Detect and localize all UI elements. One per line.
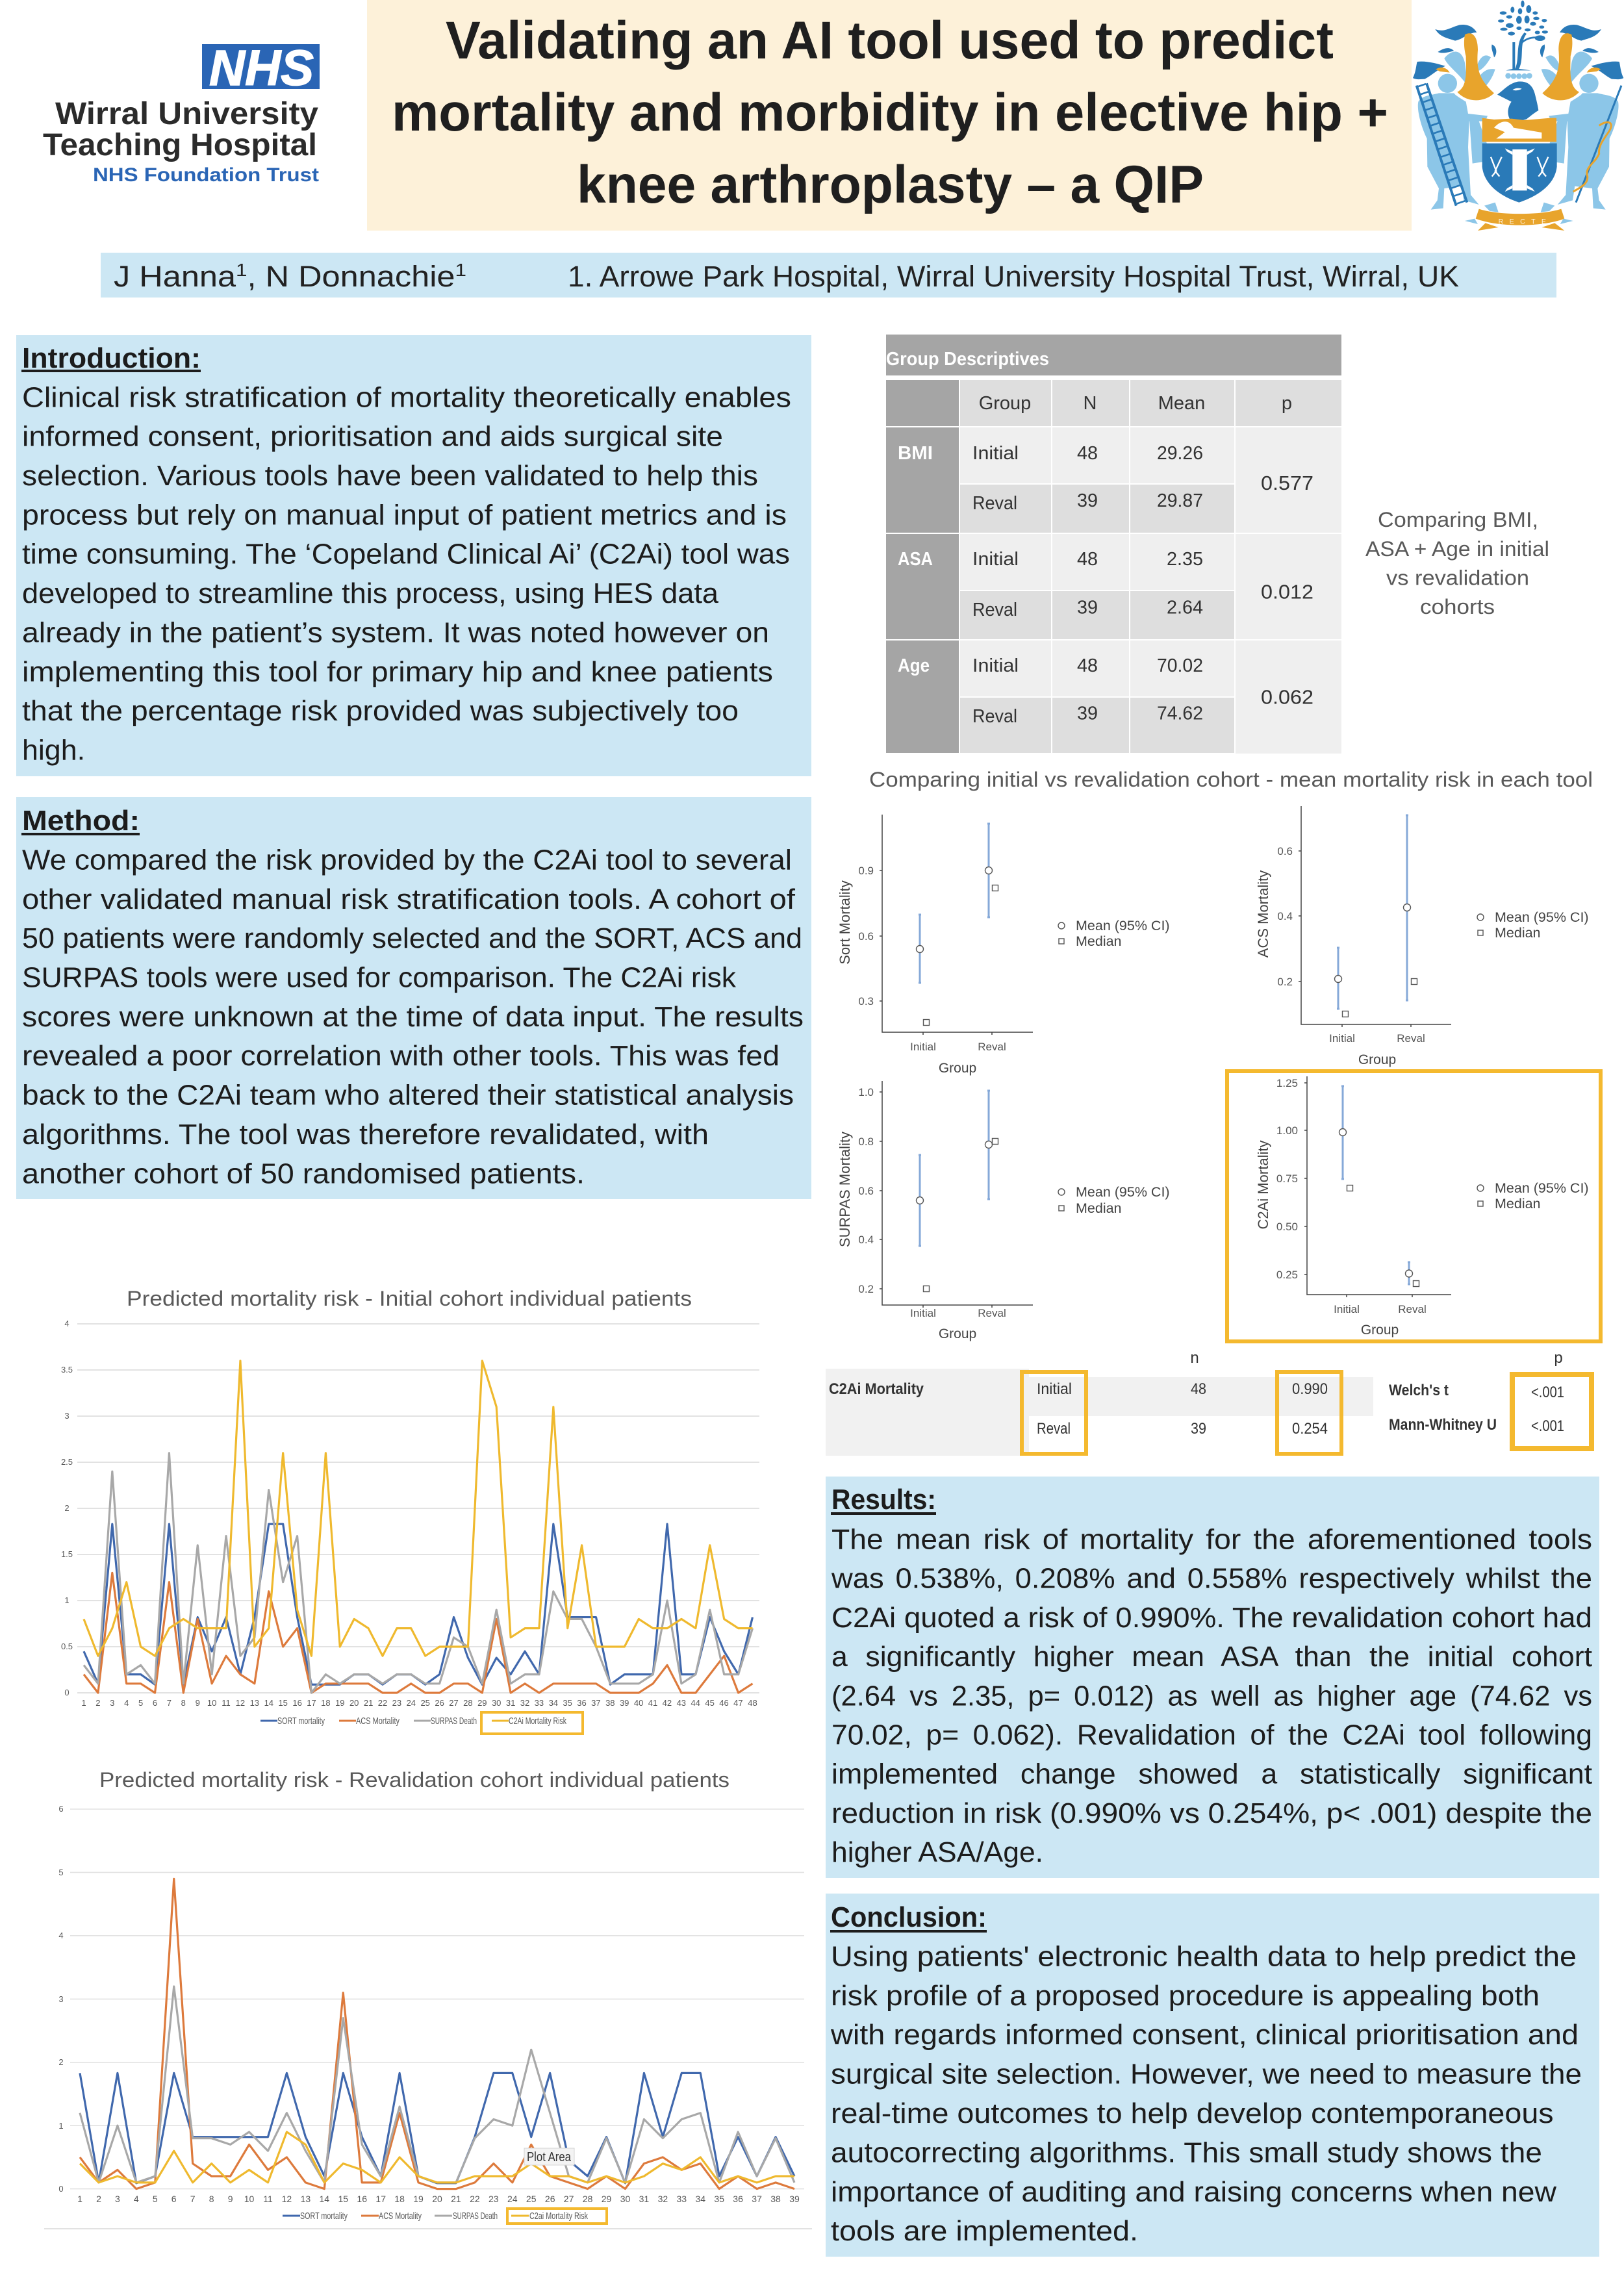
text block: introduction body <box>22 381 791 767</box>
line chart: revalidation cohort individual patients: 19 <box>413 2194 424 2204</box>
authors and affiliation bar <box>101 253 1556 298</box>
text block: results body: was 0.538%, 0.208% and 0.558% respectively whilst the <box>831 1563 1592 1595</box>
line chart: initial cohort individual patients: 0 <box>64 1688 70 1697</box>
table: group descriptives: Initial <box>972 549 1019 570</box>
heading: method: Method: <box>22 805 140 837</box>
text block: table caption: Comparing BMI, <box>1378 508 1538 531</box>
table: C2Ai mortality comparison: 48 <box>1191 1380 1206 1398</box>
text block: conclusion body: tools are implemented. <box>831 2215 1138 2247</box>
plot: Sort mortality: Median <box>1076 933 1122 949</box>
plot: C2Ai mortality highlighted: Initial <box>1334 1303 1360 1315</box>
line chart: revalidation cohort individual patients: 1 <box>77 2194 82 2204</box>
line chart: initial cohort individual patients: 1.5 <box>61 1549 73 1559</box>
text block: conclusion body: Using patients' electronic health data to help predict the <box>831 1940 1577 1972</box>
title banner: mortality and morbidity in elective hip + <box>392 83 1388 142</box>
table: group descriptives: Group <box>979 393 1031 414</box>
line chart: initial cohort individual patients: 11 <box>222 1698 231 1708</box>
table: group descriptives: 39 <box>1077 703 1098 724</box>
table: C2Ai mortality comparison: n <box>1190 1349 1199 1367</box>
chart legend: revalidation cohort <box>283 2209 607 2224</box>
plot: SURPAS mortality: Group <box>939 1326 976 1341</box>
authors and affiliation bar: 1 <box>455 260 466 280</box>
table: group descriptives: 0.062 <box>1261 686 1313 708</box>
table: group descriptives: 39 <box>1077 490 1098 511</box>
text block: conclusion body: risk profile of a proposed procedure is appealing both <box>831 1980 1540 2012</box>
text block: conclusion body: importance of auditing and raising concerns when new <box>831 2176 1556 2208</box>
chart legend: initial cohort: C2Ai Mortality Risk <box>509 1716 566 1727</box>
tooltip: plot area: Plot Area <box>527 2150 572 2164</box>
plot: Sort mortality: 0.6 <box>858 930 874 943</box>
text block: conclusion body: surgical site selection. However, we need to measure the <box>831 2059 1582 2090</box>
text block: results body: The mean risk of mortality for the aforementioned tools <box>831 1524 1592 1555</box>
table: group descriptives: Age <box>898 655 930 676</box>
table: group descriptives: Reval <box>972 600 1017 620</box>
table: group descriptives: ASA <box>898 549 933 570</box>
line chart: initial cohort individual patients: 34 <box>549 1698 558 1708</box>
line chart: initial cohort individual patients: 44 <box>691 1698 700 1708</box>
line chart: revalidation cohort individual patients: 3 <box>115 2194 120 2204</box>
text block: results body: 70.02, p= 0.062). Revalidation of the C2Ai tool following <box>831 1719 1592 1751</box>
line chart: revalidation cohort individual patients: 6 <box>58 1804 64 1814</box>
plot: C2Ai mortality highlighted: Group <box>1361 1323 1399 1338</box>
line chart: initial cohort individual patients: 23 <box>392 1698 401 1708</box>
line chart: initial cohort individual patients: 1 <box>64 1595 70 1605</box>
authors and affiliation bar: J Hanna <box>114 260 223 293</box>
line chart: initial cohort individual patients: 1 <box>81 1698 86 1708</box>
line chart: initial cohort individual patients: 17 <box>307 1698 316 1708</box>
table: group descriptives: Group Descriptives <box>886 349 1049 370</box>
heading: results: Results: <box>831 1484 936 1515</box>
table: C2Ai mortality comparison: p <box>1554 1349 1563 1367</box>
panel: method <box>16 797 811 1199</box>
line chart: revalidation cohort individual patients: 18 <box>394 2194 405 2204</box>
title banner <box>367 0 1412 231</box>
table: group descriptives: Initial <box>972 655 1019 676</box>
line chart: initial cohort individual patients: 41 <box>648 1698 657 1708</box>
table: group descriptives: 0.577 <box>1261 472 1313 494</box>
plot: C2Ai mortality highlighted: Median <box>1495 1196 1541 1211</box>
chart legend: initial cohort: ACS Mortality <box>356 1716 400 1727</box>
text block: conclusion body: autocorrecting algorithms. This small study shows the <box>831 2137 1542 2168</box>
plot: SURPAS mortality: 0.8 <box>858 1135 874 1148</box>
text block: results body: reduction in risk (0.990% vs 0.254%, p< .001) despite the <box>831 1797 1592 1829</box>
authors and affiliation bar: , N Donnachie <box>247 260 455 293</box>
line chart: initial cohort individual patients: 13 <box>250 1698 259 1708</box>
line chart: initial cohort individual patients: 3 <box>64 1411 70 1421</box>
plot: Sort mortality: 0.9 <box>858 865 874 877</box>
plot: SURPAS mortality <box>837 1081 1170 1341</box>
table: group descriptives: 48 <box>1077 655 1098 676</box>
plot: SURPAS mortality: Reval <box>978 1307 1006 1319</box>
authors and affiliation bar: 1. Arrowe Park Hospital, Wirral University Hospital Trust, Wirral, UK <box>568 260 1459 293</box>
line chart: initial cohort individual patients: 15 <box>278 1698 288 1708</box>
text block: method body: 50 patients were randomly selected and the SORT, ACS and <box>22 922 802 954</box>
line chart: initial cohort individual patients: 27 <box>449 1698 459 1708</box>
authors and affiliation bar: 1 <box>236 260 247 280</box>
text block: method body: another cohort of 50 randomised patients. <box>22 1158 585 1189</box>
line chart: initial cohort individual patients: 2.5 <box>61 1457 73 1467</box>
text block: introduction body: implementing this tool for primary hip and knee patients <box>22 656 773 688</box>
text block: introduction body: already in the patient’s system. It was noted however on <box>22 617 769 648</box>
logo: NHS Wirral University Teaching Hospital: Wirral University <box>55 97 318 131</box>
line chart: initial cohort individual patients: 5 <box>138 1698 143 1708</box>
table: group descriptives: 29.87 <box>1157 490 1203 511</box>
line chart: revalidation cohort individual patients: 16 <box>357 2194 367 2204</box>
line chart: initial cohort individual patients: 25 <box>420 1698 430 1708</box>
heading: plots comparison: Comparing initial vs revalidation cohort - mean mortality risk in each tool <box>869 768 1593 791</box>
text block: introduction body: informed consent, prioritisation and aids surgical site <box>22 421 723 453</box>
line chart: initial cohort individual patients: 39 <box>620 1698 629 1708</box>
line chart: revalidation cohort individual patients: 20 <box>432 2194 442 2204</box>
text block: method body: other validated manual risk stratification tools. A cohort of <box>22 883 796 915</box>
plot: C2Ai mortality highlighted: 0.75 <box>1276 1173 1298 1185</box>
chart legend: initial cohort: SORT mortality <box>277 1716 325 1727</box>
plot: ACS mortality <box>1255 806 1589 1067</box>
line chart: revalidation cohort individual patients: 4 <box>58 1931 64 1940</box>
line chart: revalidation cohort individual patients: 5 <box>153 2194 158 2204</box>
table: group descriptives: 2.64 <box>1167 598 1203 618</box>
text block: table caption: cohorts <box>1420 595 1495 618</box>
chart legend: initial cohort <box>260 1712 583 1734</box>
line chart: revalidation cohort individual patients: 35 <box>714 2194 724 2204</box>
plot: SURPAS mortality: SURPAS Mortality <box>837 1132 853 1247</box>
text block: conclusion body: real-time outcomes to help develop contemporaneous <box>831 2098 1554 2129</box>
plot: C2Ai mortality highlighted: 1.25 <box>1276 1077 1298 1089</box>
plot: C2Ai mortality highlighted: 0.50 <box>1276 1221 1298 1233</box>
plot: SURPAS mortality: 0.2 <box>858 1283 874 1295</box>
line chart: revalidation cohort individual patients: 7 <box>190 2194 196 2204</box>
line chart: revalidation cohort individual patients: 24 <box>507 2194 518 2204</box>
table: C2Ai mortality comparison: 0.254 <box>1292 1420 1328 1438</box>
line chart: revalidation cohort individual patients: 4 <box>134 2194 139 2204</box>
line chart: revalidation cohort individual patients: 14 <box>320 2194 329 2204</box>
line chart: initial cohort individual patients: 36 <box>577 1698 587 1708</box>
text block: conclusion body: with regards informed consent, clinical prioritisation and <box>830 2019 1579 2051</box>
table: C2Ai mortality comparison <box>826 1349 1592 1456</box>
text block: results body: C2Ai quoted a risk of 0.990%. The revalidation cohort had <box>831 1602 1592 1634</box>
line chart: revalidation cohort individual patients: 13 <box>301 2194 311 2204</box>
text block: introduction body: that the percentage risk provided was subjectively too <box>22 695 739 727</box>
text block: method body: SURPAS tools were used for comparison. The C2Ai risk <box>22 961 737 994</box>
line chart: initial cohort individual patients: 16 <box>292 1698 302 1708</box>
line chart: initial cohort individual patients: 20 <box>349 1698 359 1708</box>
plot: SURPAS mortality: Median <box>1076 1200 1122 1216</box>
line chart: revalidation cohort individual patients: 39 <box>789 2194 800 2204</box>
plot: Sort mortality: Reval <box>978 1041 1006 1053</box>
text block: introduction body: time consuming. The ‘Copeland Clinical Ai’ (C2Ai) tool was <box>22 539 790 570</box>
line chart: initial cohort individual patients: 24 <box>407 1698 416 1708</box>
table: C2Ai mortality comparison: 0.990 <box>1292 1380 1328 1398</box>
logo: NHS Wirral University Teaching Hospital: NHS Foundation Trust <box>93 164 319 186</box>
line chart: revalidation cohort individual patients: 33 <box>677 2194 687 2204</box>
line chart: initial cohort individual patients: 19 <box>335 1698 345 1708</box>
line chart: revalidation cohort individual patients: 17 <box>375 2194 386 2204</box>
line chart: initial cohort individual patients: 32 <box>520 1698 529 1708</box>
line chart: initial cohort individual patients: 37 <box>591 1698 601 1708</box>
plot: C2Ai mortality highlighted: 0.25 <box>1276 1269 1298 1281</box>
line chart: initial cohort individual patients: 7 <box>167 1698 171 1708</box>
plot: Sort mortality <box>837 815 1170 1076</box>
text block: method body <box>22 844 804 1189</box>
icon: hospital coat of arms crest: RECTE <box>1499 218 1546 226</box>
table: C2Ai mortality comparison: <.001 <box>1531 1384 1564 1401</box>
line chart: initial cohort individual patients: 21 <box>364 1698 373 1708</box>
table: C2Ai mortality comparison: Initial <box>1037 1380 1072 1398</box>
text block: results body: (2.64 vs 2.35, p= 0.012) as well as higher age (74.62 vs <box>831 1680 1592 1712</box>
line chart: revalidation cohort individual patients: 21 <box>451 2194 461 2204</box>
heading: introduction: Introduction: <box>22 342 201 374</box>
table: group descriptives: 39 <box>1077 598 1098 618</box>
line chart: initial cohort individual patients: 8 <box>181 1698 186 1708</box>
line chart: revalidation cohort individual patients: 25 <box>526 2194 537 2204</box>
table: C2Ai mortality comparison: C2Ai Mortality <box>829 1380 924 1398</box>
text block: introduction body: Clinical risk stratification of mortality theoretically enables <box>22 381 791 413</box>
plot: ACS mortality: Reval <box>1397 1032 1425 1045</box>
plot: C2Ai mortality highlighted: Mean (95% CI) <box>1495 1180 1589 1196</box>
plot: SURPAS mortality: 0.6 <box>858 1185 874 1197</box>
table: C2Ai mortality comparison: Mann-Whitney U <box>1389 1416 1497 1434</box>
chart legend: initial cohort: SURPAS Death <box>431 1716 477 1727</box>
chart legend: revalidation cohort: SORT mortality <box>300 2211 348 2222</box>
line chart: initial cohort individual patients: 38 <box>605 1698 615 1708</box>
table: group descriptives: N <box>1084 393 1097 414</box>
logo: NHS Wirral University Teaching Hospital: NHS <box>209 40 314 96</box>
line chart: initial cohort individual patients: 6 <box>153 1698 157 1708</box>
logo: NHS Wirral University Teaching Hospital <box>43 40 320 186</box>
line chart: initial cohort individual patients: 48 <box>748 1698 757 1708</box>
line chart: initial cohort individual patients: 31 <box>506 1698 515 1708</box>
line chart: initial cohort individual patients: 4 <box>64 1319 70 1328</box>
line chart: revalidation cohort individual patients: 11 <box>263 2194 273 2204</box>
table: group descriptives: 2.35 <box>1167 549 1203 570</box>
text block: introduction body: developed to streamline this process, using HES data <box>22 577 719 609</box>
text block: conclusion body <box>830 1940 1582 2247</box>
line chart: initial cohort individual patients: 12 <box>236 1698 245 1708</box>
table: C2Ai mortality comparison: Welch's t <box>1389 1382 1449 1399</box>
line chart: initial cohort individual patients: 47 <box>733 1698 743 1708</box>
table: group descriptives: Reval <box>972 706 1017 727</box>
line chart: revalidation cohort individual patients: 27 <box>564 2194 574 2204</box>
plot: Sort mortality: Mean (95% CI) <box>1076 918 1170 933</box>
line chart: revalidation cohort individual patients: 22 <box>470 2194 480 2204</box>
table: group descriptives: 48 <box>1077 549 1098 570</box>
panel: conclusion <box>826 1894 1599 2257</box>
line chart: revalidation cohort individual patients: 6 <box>171 2194 177 2204</box>
table: C2Ai mortality comparison: 39 <box>1191 1420 1206 1438</box>
line chart: revalidation cohort individual patients: 5 <box>58 1868 64 1877</box>
plot: Sort mortality: 0.3 <box>858 995 874 1008</box>
line chart: initial cohort individual patients: 43 <box>677 1698 686 1708</box>
text block: method body: algorithms. The tool was therefore revalidated, with <box>22 1119 709 1150</box>
line chart: revalidation cohort individual patients: 15 <box>338 2194 348 2204</box>
line chart: initial cohort individual patients: 10 <box>207 1698 216 1708</box>
line chart: revalidation cohort individual patients: 1 <box>58 2121 64 2131</box>
line chart: revalidation cohort individual patients: 38 <box>770 2194 781 2204</box>
line chart: revalidation cohort individual patients: 23 <box>488 2194 499 2204</box>
line chart: initial cohort individual patients: 35 <box>563 1698 572 1708</box>
line chart: initial cohort individual patients: 40 <box>634 1698 643 1708</box>
text block: results body: a significantly higher mean ASA than the initial cohort <box>831 1641 1592 1673</box>
plot: ACS mortality: 0.2 <box>1277 976 1293 988</box>
table: group descriptives: 48 <box>1077 443 1098 464</box>
text block: results body: higher ASA/Age. <box>831 1836 1043 1868</box>
line chart: initial cohort individual patients: 9 <box>196 1698 200 1708</box>
line chart: initial cohort individual patients <box>61 1287 759 1734</box>
line chart: revalidation cohort individual patients: 36 <box>733 2194 743 2204</box>
table: group descriptives: p <box>1282 393 1292 414</box>
text block: method body: revealed a poor correlation with other tools. This was fed <box>22 1040 780 1072</box>
chart legend: revalidation cohort: C2ai Mortality Risk <box>529 2211 588 2222</box>
text block: table caption: vs revalidation <box>1386 566 1529 590</box>
panel: results <box>826 1477 1599 1878</box>
line chart: revalidation cohort individual patients: 8 <box>209 2194 214 2204</box>
plot: ACS mortality: 0.4 <box>1277 910 1293 922</box>
text block: method body: back to the C2Ai team who altered their statistical analysis <box>22 1080 794 1111</box>
text block: introduction body: high. <box>22 734 85 767</box>
line chart: revalidation cohort individual patients: 32 <box>658 2194 668 2204</box>
title banner: knee arthroplasty – a QIP <box>577 155 1204 214</box>
line chart: revalidation cohort individual patients: 2 <box>96 2194 101 2204</box>
line chart: initial cohort individual patients: 3.5 <box>61 1365 73 1375</box>
line chart: revalidation cohort individual patients: 2 <box>58 2057 64 2067</box>
plot: ACS mortality: Mean (95% CI) <box>1495 909 1589 925</box>
text block: method body: scores were unknown at the time of data input. The results <box>22 1001 804 1033</box>
table: C2Ai mortality comparison: Reval <box>1037 1420 1071 1438</box>
line chart: initial cohort individual patients: 45 <box>705 1698 715 1708</box>
plot: ACS mortality: Group <box>1358 1052 1396 1067</box>
line chart: revalidation cohort individual patients: 10 <box>244 2194 254 2204</box>
line chart: revalidation cohort individual patients: 30 <box>620 2194 630 2204</box>
table: group descriptives: 70.02 <box>1157 655 1203 676</box>
line chart: revalidation cohort individual patients: 12 <box>282 2194 292 2204</box>
plot: C2Ai mortality highlighted <box>1227 1071 1601 1341</box>
plot: ACS mortality: Median <box>1495 925 1541 941</box>
line chart: initial cohort individual patients: 33 <box>535 1698 544 1708</box>
line chart: revalidation cohort individual patients: 26 <box>545 2194 555 2204</box>
text block: method body: We compared the risk provided by the C2Ai tool to several <box>22 844 792 876</box>
plot: SURPAS mortality: Mean (95% CI) <box>1076 1184 1170 1200</box>
chart legend: revalidation cohort: ACS Mortality <box>379 2211 422 2222</box>
line chart: revalidation cohort individual patients: 3 <box>58 1994 64 2004</box>
line chart: initial cohort individual patients: 0.5 <box>61 1642 73 1651</box>
table: group descriptives: 29.26 <box>1157 443 1203 464</box>
plot: C2Ai mortality highlighted: Reval <box>1398 1303 1427 1315</box>
panel: introduction <box>16 335 811 776</box>
table: group descriptives: Reval <box>972 493 1017 514</box>
plot: C2Ai mortality highlighted: 1.00 <box>1276 1124 1298 1137</box>
line chart: initial cohort individual patients: 14 <box>264 1698 273 1708</box>
text block: introduction body: selection. Various tools have been validated to help this <box>22 460 758 492</box>
chart legend: revalidation cohort: SURPAS Death <box>453 2211 498 2222</box>
line chart: initial cohort individual patients: 2 <box>64 1503 70 1513</box>
table: C2Ai mortality comparison: <.001 <box>1531 1417 1564 1435</box>
plot: SURPAS mortality: Initial <box>910 1307 936 1319</box>
title banner: Validating an AI tool used to predict <box>446 11 1334 70</box>
plot: Sort mortality: Initial <box>910 1041 936 1053</box>
line chart: initial cohort individual patients: 3 <box>110 1698 114 1708</box>
line chart: revalidation cohort individual patients <box>44 1768 812 2229</box>
line chart: initial cohort individual patients: 30 <box>492 1698 501 1708</box>
plot: ACS mortality: ACS Mortality <box>1255 870 1271 957</box>
line chart: revalidation cohort individual patients: 0 <box>58 2184 64 2194</box>
line chart: revalidation cohort individual patients: 34 <box>696 2194 705 2204</box>
table: group descriptives: 74.62 <box>1157 703 1203 724</box>
line chart: initial cohort individual patients: 4 <box>124 1698 129 1708</box>
line chart: revalidation cohort individual patients: 37 <box>752 2194 762 2204</box>
text block: table caption <box>1365 508 1549 618</box>
line chart: initial cohort individual patients: 46 <box>719 1698 729 1708</box>
text block: table caption: ASA + Age in initial <box>1365 537 1549 561</box>
chart title: initial cohort: Predicted mortality risk - Initial cohort individual patients <box>127 1287 692 1310</box>
line chart: initial cohort individual patients: 28 <box>463 1698 473 1708</box>
plot: ACS mortality: 0.6 <box>1277 845 1293 857</box>
line chart: initial cohort individual patients: 42 <box>663 1698 672 1708</box>
text block: introduction body: process but rely on manual input of patient metrics and is <box>22 499 787 531</box>
plot: Sort mortality: Sort Mortality <box>837 880 853 965</box>
plot: SURPAS mortality: 1.0 <box>858 1086 874 1098</box>
table: group descriptives <box>886 335 1341 754</box>
line chart: initial cohort individual patients: 26 <box>435 1698 444 1708</box>
table: group descriptives: BMI <box>898 443 933 464</box>
line chart: revalidation cohort individual patients: 31 <box>639 2194 649 2204</box>
line chart: initial cohort individual patients: 18 <box>321 1698 331 1708</box>
line chart: initial cohort individual patients: 2 <box>95 1698 101 1708</box>
table: group descriptives: Mean <box>1158 393 1205 414</box>
line chart: revalidation cohort individual patients: 9 <box>228 2194 233 2204</box>
table: group descriptives: 0.012 <box>1261 581 1313 603</box>
text block: results body <box>831 1524 1592 1868</box>
heading: conclusion: Conclusion: <box>831 1901 987 1933</box>
line chart: revalidation cohort individual patients: 29 <box>602 2194 611 2204</box>
chart title: revalidation cohort: Predicted mortality risk - Revalidation cohort individual patients <box>99 1768 730 1792</box>
plot: SURPAS mortality: 0.4 <box>858 1234 874 1246</box>
table: group descriptives: Initial <box>972 443 1019 464</box>
line chart: initial cohort individual patients: 29 <box>477 1698 487 1708</box>
line chart: revalidation cohort individual patients: 28 <box>583 2194 593 2204</box>
plot: ACS mortality: Initial <box>1329 1032 1355 1045</box>
line chart: initial cohort individual patients: 22 <box>378 1698 387 1708</box>
logo: NHS Wirral University Teaching Hospital: Teaching Hospital <box>43 128 317 162</box>
text block: results body: implemented change showed a statistically significant <box>831 1758 1592 1790</box>
icon: hospital coat of arms crest <box>1413 1 1623 231</box>
plot: Sort mortality: Group <box>939 1061 976 1076</box>
plot: C2Ai mortality highlighted: C2Ai Mortality <box>1255 1141 1271 1229</box>
